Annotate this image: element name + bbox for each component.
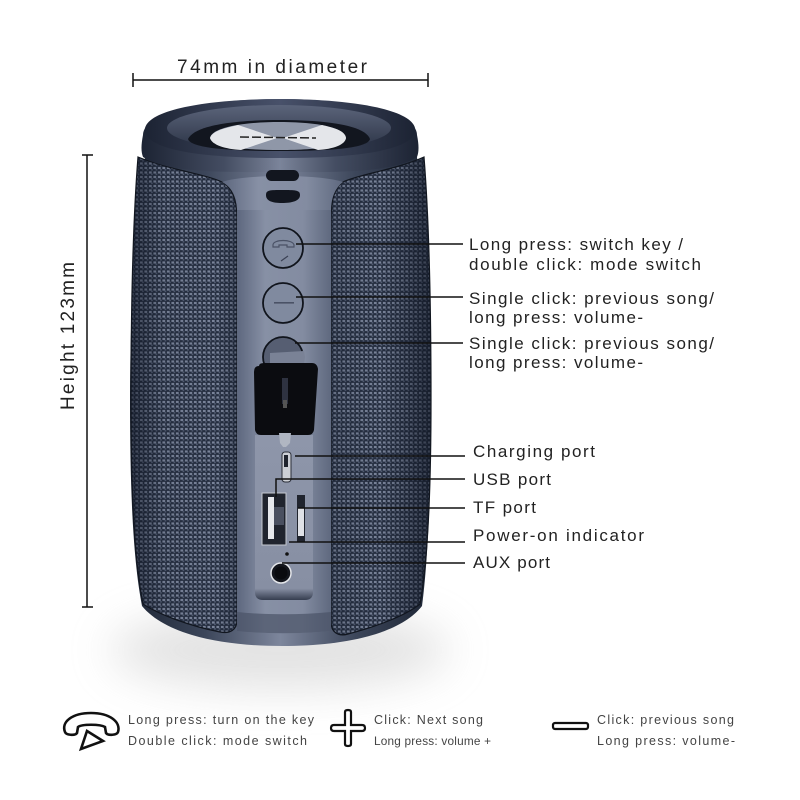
charging port [282,452,291,482]
dimension: height: Height 123mm [58,262,79,410]
port recess panel [255,433,313,600]
callout: call button [469,235,701,274]
port labels: Charging port [473,442,595,461]
port labels: USB port [473,470,551,489]
button: call [263,228,303,268]
legend: minus key [553,713,735,748]
callout: minus button: long press: volume- [469,308,643,327]
port labels: AUX port [473,553,550,572]
fabric grille left [131,157,237,632]
speaker cone [210,122,346,150]
rim [142,99,418,172]
icon: minus [553,723,588,729]
legend: call key: Long press: turn on the key [128,713,315,727]
legend: minus key: Click: previous song [597,713,734,727]
AUX port [271,563,291,583]
callout: call button: Long press: switch key / [469,235,683,254]
legend: plus key: Click: Next song [374,713,483,727]
floor shadow [110,610,450,690]
legend: call key [64,713,315,749]
port labels: Power-on indicator [473,526,644,545]
button: plus (covered) [263,337,303,377]
speaker body [130,150,431,646]
TF port [297,495,305,542]
callout: plus button: Single click: previous song/ [469,334,714,353]
dimension: diameter: 74mm in diameter [177,57,368,78]
leader lines [276,244,465,563]
callout: plus button: long press: volume- [469,353,643,372]
button: minus [263,283,303,323]
rubber port cover [254,351,318,435]
callout: call button: double click: mode switch [469,255,701,274]
vent slots [266,170,300,203]
port labels [473,442,644,572]
speaker [130,99,431,646]
plug stem [279,433,291,447]
dimension: height [58,155,93,607]
legend: minus key: Long press: volume- [597,734,735,748]
USB port [262,493,286,545]
legend: plus key: Long press: volume + [374,734,491,748]
port labels: TF port [473,498,536,517]
legend: plus key [331,710,491,748]
centre strip [237,208,331,633]
fabric grille right [331,157,431,635]
power-on indicator [285,552,289,556]
icon: phone [64,713,118,749]
icon: plus [331,710,365,746]
callout: minus button [469,289,714,327]
legend: call key: Double click: mode switch [128,734,307,748]
dimension: diameter [133,57,428,87]
callout: plus button [469,334,714,372]
callout: minus button: Single click: previous song/ [469,289,714,308]
base band [237,612,331,633]
